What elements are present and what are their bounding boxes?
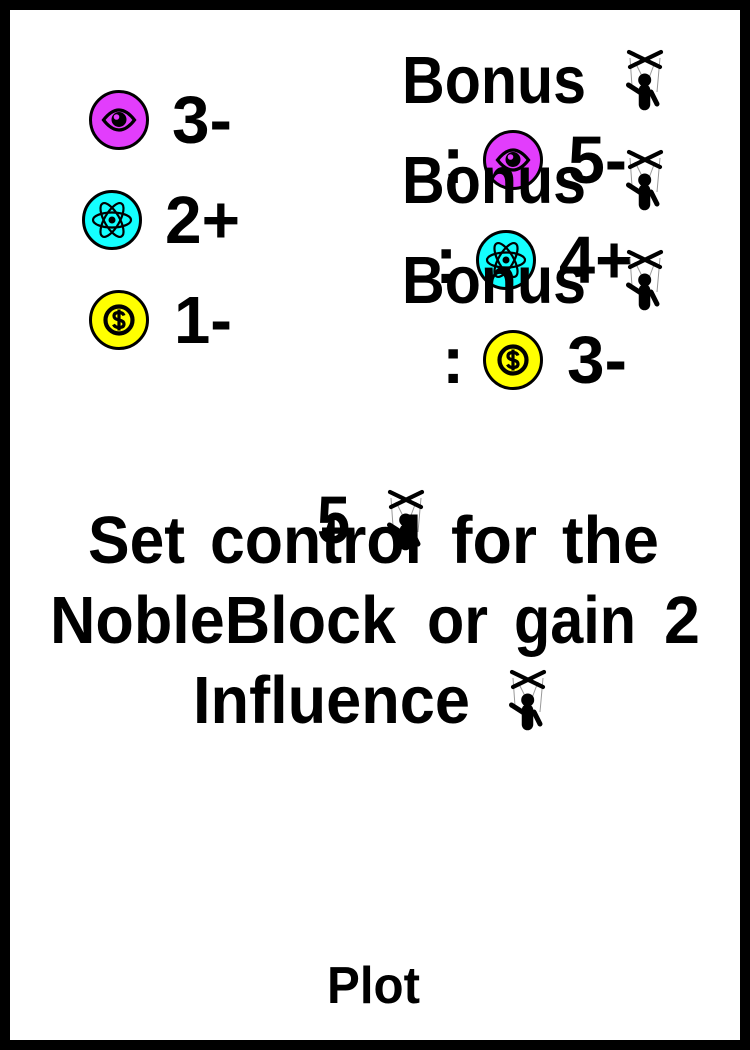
- card type label: Plot: [327, 957, 420, 1015]
- text: 3-: 3-: [567, 323, 627, 398]
- icon: atom token: [478, 232, 534, 288]
- text block: effect: gain: [514, 583, 636, 658]
- text: 5: 5: [317, 483, 350, 558]
- icon: atom token: [84, 192, 140, 248]
- text: bonus label: Bonus: [402, 43, 586, 118]
- text: bonus label: Bonus: [402, 243, 586, 318]
- text block: effect: control: [210, 503, 422, 578]
- influence value: [317, 483, 422, 558]
- icon: puppet: [628, 252, 661, 304]
- bonus row: eye: [402, 43, 661, 198]
- bonus row: coin: [402, 243, 661, 398]
- icon: coin token: [484, 332, 542, 388]
- cost row: coin 1-: [90, 283, 232, 358]
- bonus row: atom: [402, 143, 661, 298]
- text block: effect: Influence: [193, 663, 470, 738]
- cost row: atom 2+: [84, 183, 240, 258]
- text block: effect: NobleBlock: [50, 583, 397, 658]
- icon: puppet: [512, 672, 544, 724]
- text block: effect: 2: [664, 583, 700, 658]
- text block: effect: for: [451, 503, 537, 578]
- text: colon: :: [442, 323, 464, 398]
- icon: coin token: [90, 292, 148, 348]
- icon: puppet: [390, 492, 422, 544]
- text block: effect: or: [427, 583, 488, 658]
- panel: cost list: [84, 83, 240, 358]
- text: colon: :: [442, 123, 464, 198]
- text: 4+: 4+: [559, 223, 633, 298]
- icon: eye token: [90, 92, 148, 148]
- text block: effect: the: [562, 503, 659, 578]
- text: 3-: 3-: [172, 83, 232, 158]
- text: 1-: 1-: [174, 283, 232, 358]
- text: bonus label: Bonus: [402, 143, 586, 218]
- text block: effect: [50, 503, 700, 738]
- text: 5-: 5-: [568, 123, 627, 198]
- cost row: eye 3-: [90, 83, 232, 158]
- text: colon: :: [435, 223, 457, 298]
- text block: effect: Set: [88, 503, 185, 578]
- icon: eye token: [484, 132, 542, 188]
- panel: bonus list: [402, 43, 661, 398]
- text: 2+: 2+: [165, 183, 240, 258]
- icon: puppet: [628, 152, 661, 204]
- icon: puppet: [628, 52, 661, 104]
